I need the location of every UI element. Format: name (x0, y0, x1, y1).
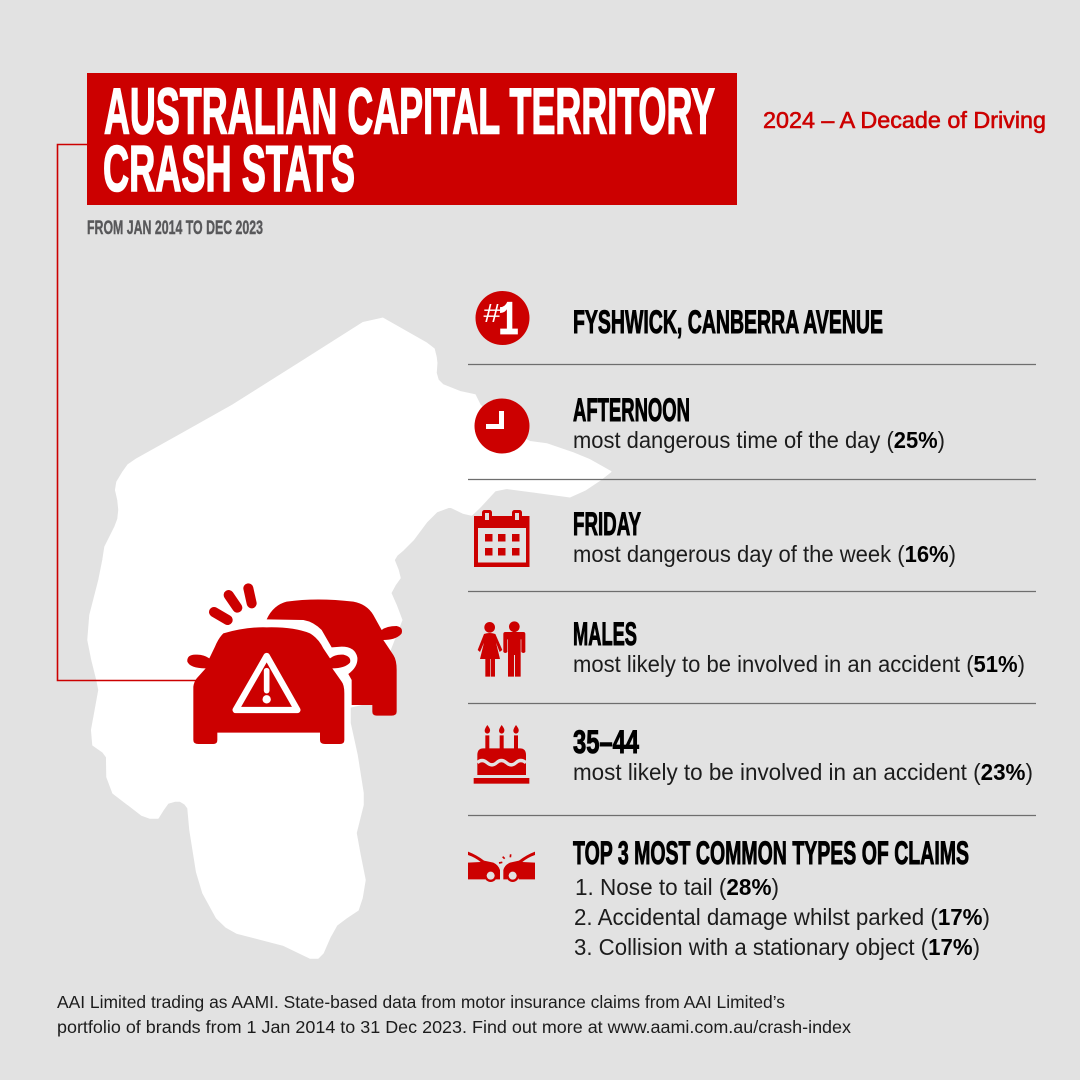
date range subheading: FROM JAN 2014 TO DEC 2023 (87, 217, 263, 239)
icon: woman and man (478, 621, 525, 677)
connector line (58, 144, 200, 680)
title banner: CRASH STATS (103, 132, 355, 205)
time detail: most dangerous time of the day (25%) (573, 427, 945, 453)
footnote: AAI Limited trading as AAMI. State-based data from motor insurance claims from AAI Limited’s (57, 992, 785, 1012)
divider lines (468, 364, 1036, 816)
icon: number one badge: # (483, 298, 501, 328)
stat: claim types (468, 835, 990, 960)
stat: most dangerous time (474, 392, 945, 454)
icon: head-on car collision (468, 852, 535, 882)
icon: calendar (474, 510, 530, 567)
location heading: FYSHWICK, CANBERRA AVENUE (573, 304, 883, 340)
stat: age group (474, 724, 1033, 785)
gender detail: most likely to be involved in an accident (51%) (573, 651, 1025, 677)
icon: clock (474, 398, 530, 454)
gender heading: MALES (573, 616, 637, 652)
footnote (57, 992, 851, 1037)
claim 2: 2. Accidental damage whilst parked (17%) (574, 904, 990, 930)
age heading: 35–44 (573, 724, 639, 760)
day heading: FRIDAY (573, 506, 641, 542)
claim 3: 3. Collision with a stationary object (17%) (574, 934, 980, 960)
stat: top crash location (476, 291, 883, 349)
day detail: most dangerous day of the week (16%) (573, 541, 956, 567)
claim 1: 1. Nose to tail (28%) (575, 874, 779, 900)
footnote: portfolio of brands from 1 Jan 2014 to 31 Dec 2023. Find out more at www.aami.com.au/crash-index (57, 1017, 851, 1037)
stat: gender (478, 616, 1025, 677)
icon: number one badge (476, 291, 530, 349)
title banner (87, 73, 737, 205)
age detail: most likely to be involved in an accident (23%) (573, 759, 1033, 785)
time heading: AFTERNOON (573, 392, 690, 428)
map of Australian Capital Territory (88, 318, 611, 958)
icon: birthday cake (474, 725, 529, 784)
report label: 2024 – A Decade of Driving (763, 107, 1046, 133)
icon: number one badge: 1 (498, 295, 519, 349)
icon: cars with warning triangle (187, 588, 402, 744)
stat: most dangerous day (474, 506, 956, 567)
